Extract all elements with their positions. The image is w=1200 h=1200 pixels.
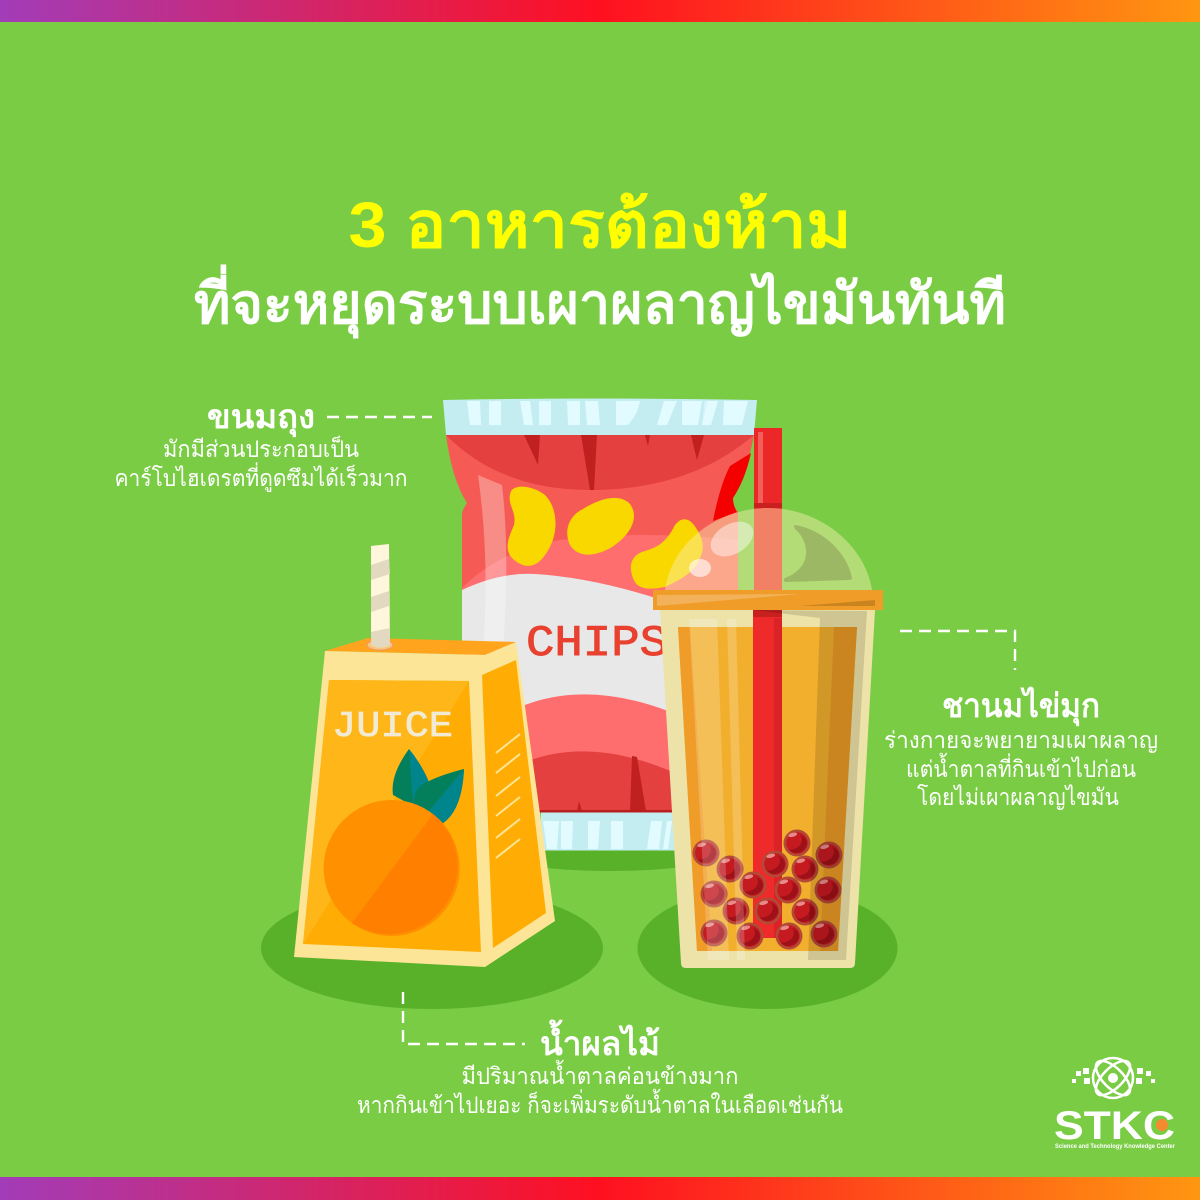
title bbox=[194, 189, 1006, 339]
logo atom icon bbox=[1090, 1055, 1136, 1101]
logo tagline: Science and Technology Knowledge Center bbox=[1055, 1144, 1176, 1150]
chip 2 bbox=[567, 498, 634, 555]
title: 3 อาหารต้องห้าม bbox=[348, 189, 852, 261]
straw top bbox=[754, 428, 782, 592]
text block: juice bbox=[357, 1019, 843, 1118]
chip 1 bbox=[508, 487, 556, 566]
orange bbox=[324, 800, 460, 936]
lid rim bbox=[653, 590, 883, 610]
dashed connector: bubble tea bbox=[900, 631, 1015, 670]
top gradient bar bbox=[0, 0, 1200, 22]
leaves bbox=[393, 749, 464, 823]
juice label: JUICE bbox=[332, 706, 453, 747]
cup body bbox=[660, 610, 875, 968]
text block: bubble tea: แต่น้ำตาลที่กินเข้าไปก่อน bbox=[906, 753, 1136, 782]
straw in cup bbox=[753, 610, 782, 938]
icon: chips bag bbox=[443, 398, 757, 850]
paper straw bbox=[367, 544, 393, 650]
text block: bubble tea: โดยไม่เผาผลาญไขมัน bbox=[917, 784, 1119, 810]
dashed connector: chips bbox=[327, 416, 432, 418]
icon: bubble tea cup bbox=[653, 428, 883, 968]
text block: bubble tea bbox=[884, 686, 1158, 810]
text block: chips: คาร์โบไฮเดรตที่ดูดซึมได้เร็วมาก bbox=[114, 462, 408, 492]
text block: bubble tea: ร่างกายจะพยายามเผาผลาญ bbox=[884, 727, 1158, 753]
logo wordmark: STKC bbox=[1054, 1104, 1175, 1148]
text block: juice: หากกินเข้าไปเยอะ ก็จะเพิ่มระดับน้ำตาลในเลือดเช่นกัน bbox=[357, 1089, 843, 1118]
dashed connector: juice bbox=[403, 992, 525, 1044]
text block: chips bbox=[114, 398, 408, 492]
text block: juice: น้ำผลไม้ bbox=[540, 1019, 660, 1062]
chip 3 bbox=[631, 519, 703, 589]
boba pearls bbox=[692, 830, 842, 950]
text block: juice: มีปริมาณน้ำตาลค่อนข้างมาก bbox=[462, 1060, 738, 1089]
dome lid bbox=[665, 508, 872, 590]
logo: STKC bbox=[1054, 1055, 1176, 1150]
title: ที่จะหยุดระบบเผาผลาญไขมันทันที bbox=[194, 264, 1006, 339]
logo dot bbox=[1156, 1119, 1168, 1131]
drink bbox=[678, 627, 857, 951]
chips label: CHIPS bbox=[526, 619, 668, 669]
bottom gradient bar bbox=[0, 1177, 1200, 1200]
icon: juice box bbox=[294, 544, 555, 967]
logo pixel squares bbox=[1072, 1068, 1155, 1084]
ground shadows bbox=[261, 831, 898, 1009]
text block: chips: มักมีส่วนประกอบเป็น bbox=[163, 434, 359, 462]
text block: bubble tea: ชานมไข่มุก bbox=[942, 686, 1100, 727]
side panel lines bbox=[496, 734, 520, 858]
text block: chips: ขนมถุง bbox=[207, 398, 315, 438]
